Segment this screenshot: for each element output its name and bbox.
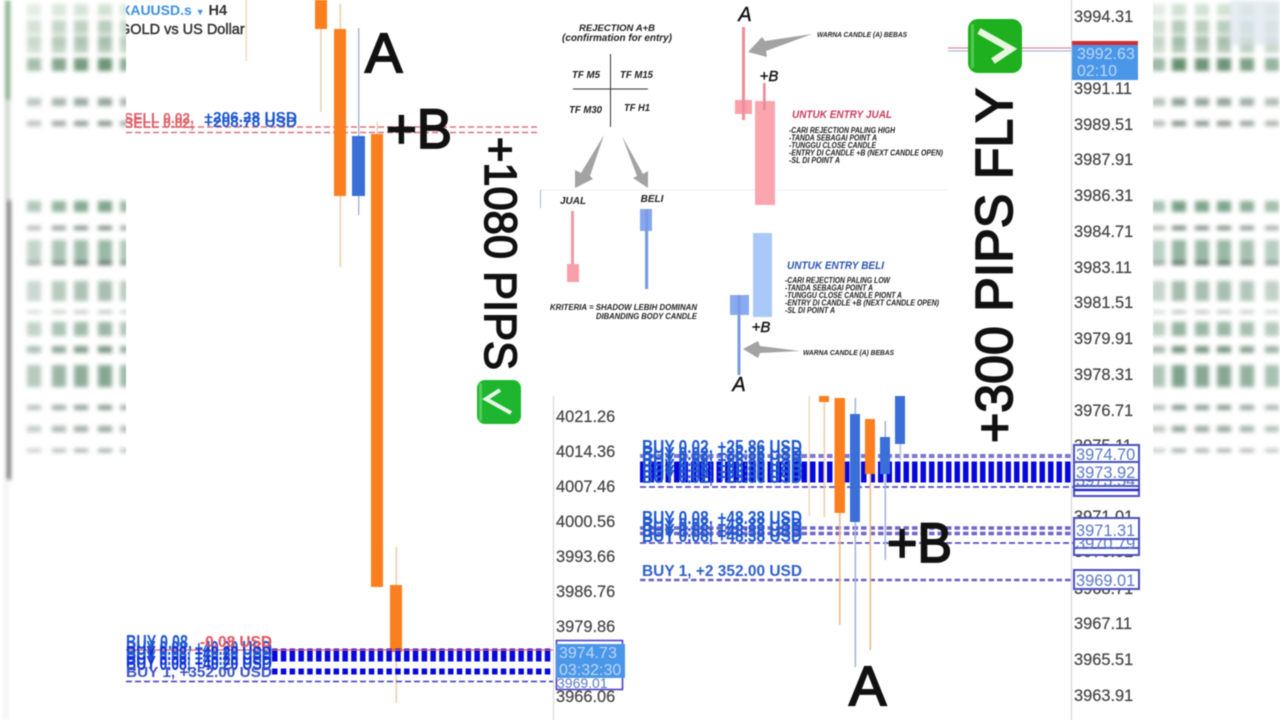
price axis: left chart: 3966.06	[556, 688, 615, 706]
arrow: to JUAL	[575, 135, 604, 188]
price axis: left chart: 4021.26	[556, 408, 615, 426]
buy setup candles: A	[731, 374, 746, 396]
overlapping buy order labels: BUY 0.08, +40.20 USD	[126, 648, 272, 670]
text block: entry jual: -SL DI POINT A	[789, 156, 840, 165]
price axis: right chart: 3975.11	[1074, 437, 1132, 455]
sell order lines and labels: +206.28 USD	[204, 109, 297, 126]
timeframe cross table	[569, 54, 653, 127]
price axis: left chart: 3993.66	[556, 548, 615, 566]
panel: left H4 chart	[119, 0, 554, 703]
overlapping buy order labels: BUY 0.08, +40.20 USD	[126, 638, 272, 660]
note: candle A colour free (sell): WARNA CANDLE (A) BEBAS	[817, 30, 907, 39]
timeframe cross table: TF H1	[624, 103, 650, 114]
big label: A on right chart: A	[849, 654, 887, 717]
text block: entry jual: -TUNGGU CLOSE CANDLE	[789, 141, 877, 150]
sell order lines and labels: +208.78 USD	[204, 114, 297, 131]
timeframe cross table: TF M15	[620, 70, 653, 81]
price axis: right chart: 3983.11	[1074, 259, 1132, 277]
price axis: left chart: 3986.76	[556, 583, 615, 601]
order price labels, lower group	[1074, 518, 1139, 555]
overlapping buy labels, lower group: BUY 0.08, +48.38 USD	[642, 521, 802, 541]
price axis: right chart: 3968.71	[1074, 580, 1133, 598]
price axis: right chart: 3979.91	[1074, 330, 1133, 348]
chart title: symbol and timeframe: XAUUSD.s ▼ H4	[121, 2, 227, 19]
price axis: left chart: 4014.36	[556, 443, 615, 461]
text block: entry beli	[785, 260, 939, 315]
price axis: right chart: 3970.01	[1074, 543, 1133, 561]
big label: A on left chart: A	[365, 21, 403, 84]
big label: +B on right chart: +B	[887, 511, 952, 574]
text block: entry jual: -TANDA SEBAGAI POINT A	[789, 134, 877, 142]
price axis: left chart: 4007.46	[556, 478, 615, 496]
buy order dashed lines	[640, 456, 1073, 580]
rotated label: +300 PIPS FLY: +300 PIPS FLY	[966, 88, 1024, 443]
price axis: right chart: 3971.01	[1074, 508, 1133, 526]
price axis: right chart: 3989.51	[1074, 116, 1133, 134]
buy order lines band	[126, 650, 554, 682]
text block: entry beli: UNTUK ENTRY BELI	[787, 260, 885, 272]
order price labels, lower group: 3971.31	[1076, 522, 1135, 540]
price axis: right chart: 3986.31	[1074, 187, 1133, 205]
current price tag: 3974.73	[559, 645, 617, 662]
price axis: left chart: 3979.86	[556, 618, 615, 636]
price axis: right chart: 3987.91	[1074, 151, 1133, 169]
price axis: right chart: 3978.31	[1074, 366, 1133, 384]
overlapping buy labels, upper group: BUY 0.02, +25.86 USD	[642, 456, 802, 476]
overlapping buy labels, upper group: BUY 0.02, +25.86 USD	[642, 462, 802, 482]
price axis: right chart: 3984.71	[1074, 223, 1133, 241]
order price labels, upper group	[1074, 445, 1139, 496]
current price tag, top right	[1072, 41, 1138, 80]
price axis: left chart: 4000.56	[556, 513, 615, 531]
sell setup candles: +B	[760, 68, 778, 85]
price axis: right chart: 3963.91	[1074, 687, 1133, 705]
overlapping buy labels, upper group: BUY 0.02, +25.86 USD	[642, 467, 802, 487]
icon: green arrow badge, left	[477, 380, 521, 424]
criteria note	[550, 303, 698, 321]
text block: entry beli: -TUNGGU CLOSE CANDLE PIONT A	[785, 291, 902, 300]
timeframe cross table: TF M5	[572, 70, 600, 81]
background: blurred left strip	[5, 0, 134, 720]
example candle: BELI: BELI	[641, 194, 664, 205]
example candle: BELI	[640, 194, 664, 289]
order price labels, upper group: 3973.54	[1076, 472, 1135, 490]
note: candle A colour free (buy): WARNA CANDLE (A) BEBAS	[803, 348, 894, 357]
text block: entry beli: -TANDA SEBAGAI POINT A	[785, 284, 873, 292]
buy setup candles	[730, 233, 772, 396]
price axis: right chart: 3981.51	[1074, 294, 1133, 312]
example candle: JUAL: JUAL	[560, 196, 586, 207]
order price labels, upper group: 3973.92	[1076, 464, 1135, 482]
text block: entry jual	[789, 109, 943, 165]
rotated label: +1080 PIPS: +1080 PIPS	[475, 137, 526, 370]
order price labels, lower group: 3970.79	[1076, 535, 1135, 553]
example candle: JUAL	[560, 196, 586, 282]
price axis: right chart: 3976.71	[1074, 402, 1133, 420]
overlapping buy order labels: BUY 0.08, +40.20 USD	[126, 653, 272, 675]
text block: entry beli: -ENTRY DI CANDLE +B (NEXT CANDLE OPEN)	[785, 298, 939, 308]
text block: entry jual: -ENTRY DI CANDLE +B (NEXT CANDLE OPEN)	[789, 148, 943, 158]
buy setup candles: +B	[752, 319, 770, 336]
buy label: 1 lot: BUY 1, +2 352.00 USD	[642, 563, 802, 580]
chart title: symbol and timeframe	[125, 4, 246, 36]
price axis: left chart: 3969.01	[557, 675, 608, 691]
sell setup candles: A	[737, 4, 752, 26]
overlapping buy labels, upper group	[642, 437, 802, 487]
divider in central diagram	[540, 190, 948, 208]
overlapping buy labels, lower group: BUY 0.08, +48.38 USD	[642, 508, 802, 528]
candlesticks: right chart	[808, 396, 905, 667]
overlapping buy labels, lower group: BUY 0.08, +48.38 USD	[642, 515, 802, 535]
current price tag: 03:32:30	[559, 662, 621, 679]
text block: entry jual: -CARI REJECTION PALING HIGH	[789, 126, 895, 135]
criteria note: DIBANDING BODY CANDLE	[596, 312, 698, 321]
sell order lines and labels	[124, 109, 540, 132]
order price label: 3969.01: 3969.01	[1076, 572, 1135, 590]
candlesticks: left chart	[246, 0, 402, 703]
current price tag, top right: 3992.63	[1077, 46, 1135, 63]
overlapping buy labels, upper group: BUY 0.02, +25.86 USD	[642, 444, 802, 464]
text block: entry jual: UNTUK ENTRY JUAL	[792, 109, 892, 121]
order price labels, upper group: 3974.70	[1076, 446, 1135, 464]
arrow: buy candle A note	[743, 341, 800, 358]
overlapping buy order labels: BUY 0.08, +40.20 USD	[126, 643, 272, 665]
overlapping buy order labels: BUY 0.08,	[126, 632, 192, 654]
price axis: right chart	[1072, 0, 1133, 720]
overlapping buy labels, upper group: BUY 0.02, +25.86 USD	[642, 437, 802, 457]
current price tag	[556, 644, 625, 679]
price axis: right chart: 3967.11	[1074, 615, 1132, 633]
panel: right lower chart	[640, 396, 1073, 667]
overlapping buy order labels: -0.08 USD	[200, 634, 272, 651]
overlapping buy labels, lower group: BUY 0.08, +48.38 USD	[642, 526, 802, 546]
order price boxes behind current price	[556, 640, 622, 690]
criteria note: KRITERIA = SHADOW LEBIH DOMINAN	[550, 303, 697, 312]
price axis: right chart: 3965.51	[1074, 651, 1133, 669]
text block: entry beli: -SL DI POINT A	[785, 306, 835, 315]
sell setup candles	[735, 4, 778, 205]
price lines at top right	[948, 48, 1072, 51]
background: blurred right strip	[1151, 0, 1280, 452]
arrow: sell candle A note	[748, 34, 812, 57]
overlapping buy labels, lower group	[642, 508, 802, 546]
chart title: symbol and timeframe: GOLD vs US Dollar	[119, 22, 245, 38]
sell order lines and labels: SELL 0.02,	[124, 110, 194, 127]
overlapping buy order labels: BUY 1, +352.00 USD	[126, 664, 272, 681]
big label: +B on left chart: +B	[386, 97, 452, 160]
overlapping buy labels, upper group: BUY 0.02, +25.86 USD	[642, 450, 802, 470]
timeframe cross table: TF M30	[569, 105, 602, 116]
overlapping buy order labels	[126, 632, 272, 681]
price axis: right chart: 3994.31	[1074, 8, 1133, 26]
text block: entry beli: -CARI REJECTION PALING LOW	[785, 276, 891, 285]
sell order lines and labels: SELL 0.02,	[124, 115, 194, 132]
heading: rejection A+B: (confirmation for entry)	[562, 33, 673, 44]
heading: rejection A+B	[562, 23, 673, 44]
price axis: left chart	[554, 396, 625, 720]
heading: rejection A+B: REJECTION A+B	[579, 23, 655, 34]
price axis: right chart: 3991.11	[1074, 80, 1132, 98]
current price tag, top right: 02:10	[1077, 63, 1117, 80]
arrow: to BELI	[622, 136, 648, 188]
icon: green arrow badge, right	[968, 19, 1022, 73]
